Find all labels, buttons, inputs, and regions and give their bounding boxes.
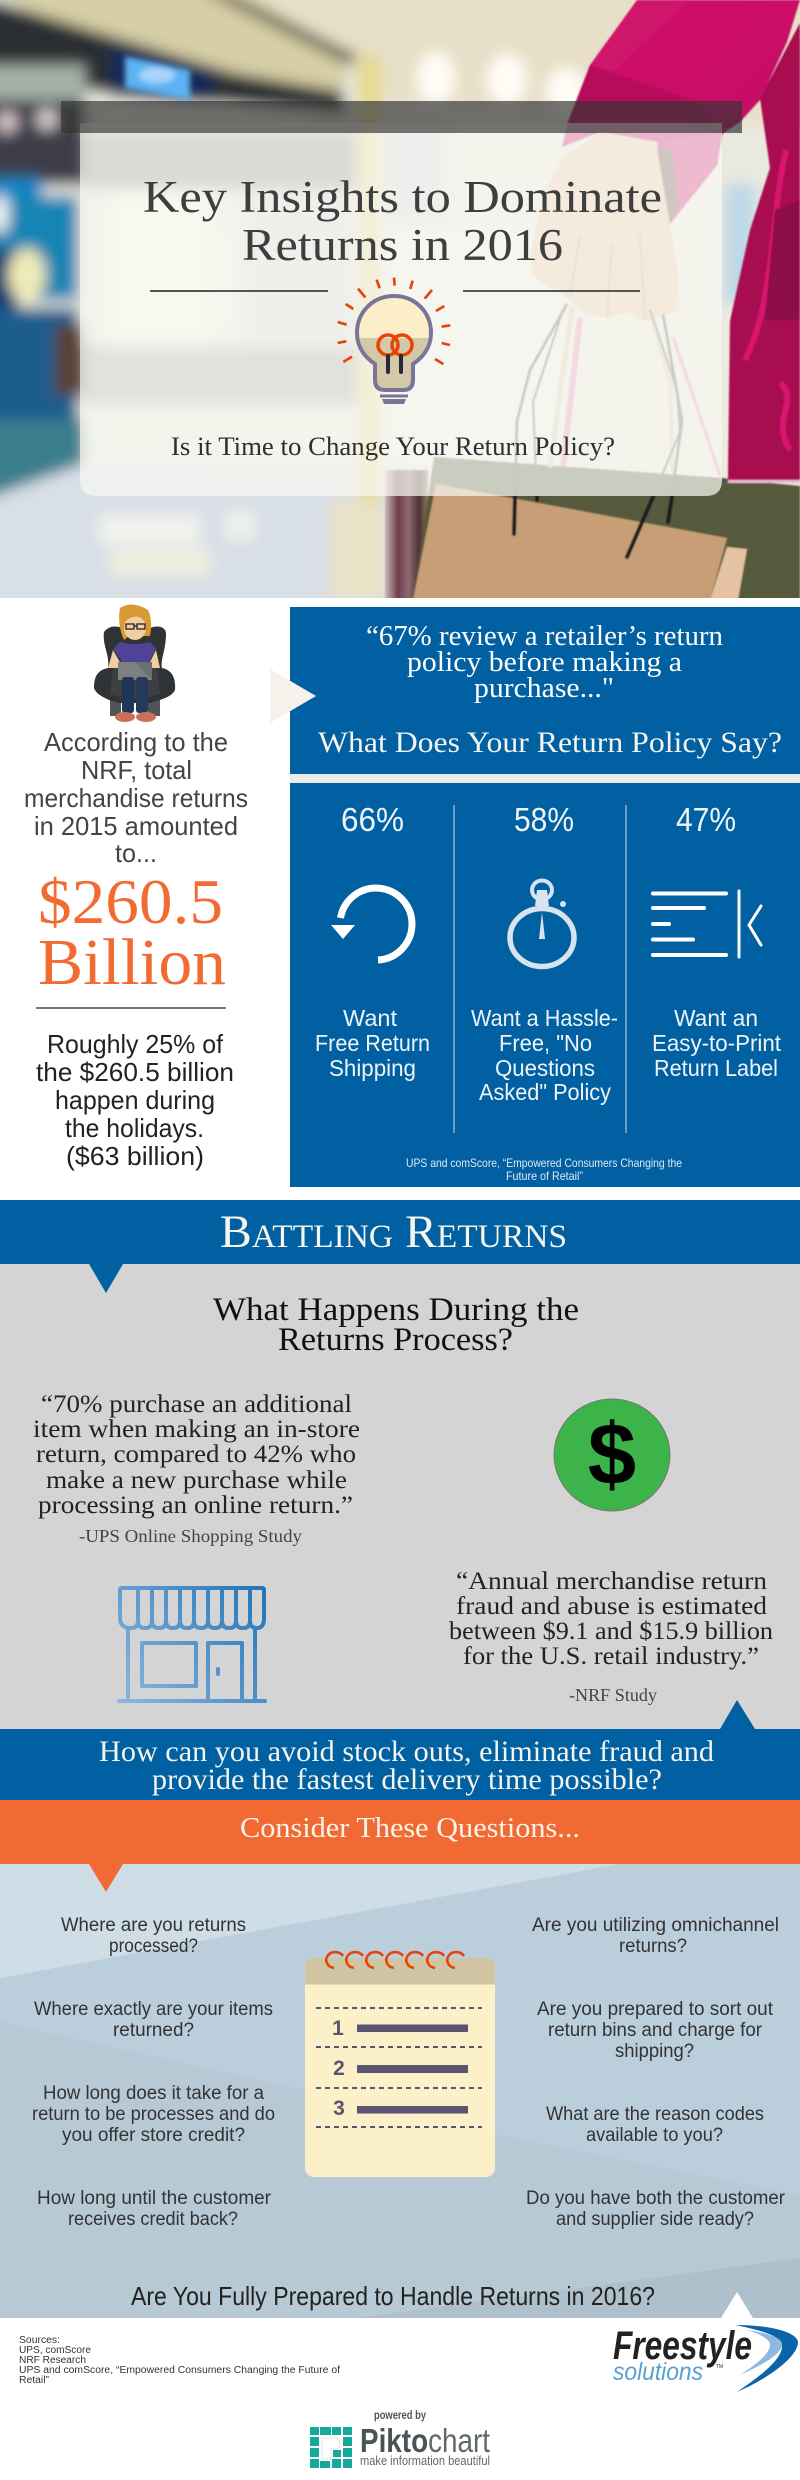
hero photo: blurred shopping mall with shopper [0,0,800,630]
section: battling returns [0,1200,800,1800]
right questions: What are the reason codes [546,2104,764,2125]
logo: Freestyle Solutions: solutions [613,2358,703,2386]
quote: in-store purchases: processing an online return.” [38,1492,353,1519]
left questions: returned? [113,2020,194,2041]
right questions: available to you? [586,2125,723,2146]
section background [0,1864,800,2318]
icon: light bulb [338,278,450,404]
holiday statistic [36,1029,234,1171]
left questions: return to be processes and do [32,2104,275,2125]
stat: hassle-free: Questions [495,1055,595,1081]
stat: free return shipping: Shipping [329,1055,416,1081]
logo: Piktochart [310,2422,490,2468]
intro text [24,727,248,868]
right questions: Are you utilizing omnichannel [532,1915,779,1936]
right questions: and supplier side ready? [556,2209,754,2230]
source note: Future of Retail” [506,1169,583,1183]
powered by credit: powered by [374,2408,426,2422]
stat: free return shipping: Free Return [315,1030,430,1056]
stat: easy-to-print label: Want an [674,1005,758,1031]
right questions: shipping? [615,2041,694,2062]
title: Key Insights to Dominate [143,172,662,222]
section: consider these questions [0,1800,800,2318]
icon: dollar coin: $ [588,1406,636,1503]
illustration: person in armchair with laptop [94,604,175,722]
hero banner [0,0,800,630]
title [143,172,662,270]
holiday statistic: the holidays. [65,1113,204,1143]
holiday statistic: ($63 billion) [66,1141,204,1171]
quote: fraud: for the U.S. retail industry.” [463,1643,759,1670]
sources: UPS and comScore, “Empowered Consumers Changing the Future of [19,2365,340,2376]
question band [0,1729,800,1800]
stat: easy-to-print label: Easy-to-Print [652,1030,782,1056]
icon: store front [119,1588,265,1701]
section heading band [0,1200,800,1264]
right questions: Do you have both the customer [526,2188,786,2209]
left questions: you offer store credit? [62,2125,245,2146]
logo: Freestyle Solutions: Freestyle [613,2324,752,2368]
left questions: receives credit back? [68,2209,238,2230]
left questions [32,1915,275,2230]
quote: purchase..." [474,672,614,704]
logo: Piktochart: Piktochart [360,2422,490,2459]
big number [38,867,226,999]
left questions: Where are you returns [61,1915,246,1936]
icon: notepad checklist [305,1952,495,2177]
quote: fraud [449,1568,774,1670]
left questions: Where exactly are your items [34,1999,273,2020]
big number: Billion [38,926,226,999]
quote: in-store purchases: item when making an in-store [33,1416,360,1443]
stat: hassle-free: Free, "No [499,1030,592,1056]
stat: free return shipping: Want [343,1005,398,1031]
question band: How can you avoid stock outs, eliminate fraud and [99,1735,714,1768]
section: battling returns: Battling Returns [220,1206,567,1258]
quote: fraud: “Annual merchandise return [456,1568,768,1595]
closing question: Are You Fully Prepared to Handle Returns in 2016? [131,2281,655,2311]
quote: policy before making a [407,646,682,678]
sources: Retail” [19,2375,49,2386]
question band: provide the fastest delivery time possible? [152,1763,662,1796]
left questions: processed? [109,1936,198,1957]
big number: $260.5 [38,867,223,937]
sources: NRF Research [19,2355,86,2366]
intro text: According to the [44,727,228,757]
subheading: Returns Process? [278,1322,513,1358]
policy heading: What Does Your Return Policy Say? [318,726,782,759]
source note [406,1156,682,1183]
quote: fraud: between $9.1 and $15.9 billion [449,1618,774,1645]
orange heading band: Consider These Questions... [240,1812,580,1844]
subheading [213,1292,579,1358]
holiday statistic: the $260.5 billion [36,1057,234,1087]
holiday statistic: Roughly 25% of [47,1029,224,1059]
stat: hassle-free: Want a Hassle- [471,1005,618,1031]
attribution: -NRF Study [569,1685,657,1705]
left questions: How long until the customer [37,2188,272,2209]
subtitle: Is it Time to Change Your Return Policy? [171,432,615,461]
quote: in-store purchases: return, compared to 42% who [36,1441,356,1468]
right questions: Are you prepared to sort out [537,1999,774,2020]
sources: UPS, comScore [19,2345,91,2356]
stat: free return shipping [315,801,430,1081]
right questions [526,1915,786,2230]
logo: Piktochart: make information beautiful [360,2454,490,2468]
intro text: in 2015 amounted [34,811,238,841]
holiday statistic: happen during [55,1085,215,1115]
source note: UPS and comScore, “Empowered Consumers Changing the [406,1156,682,1170]
quote: in-store purchases: “70% purchase an additional [41,1391,352,1418]
sources [19,2335,340,2386]
quote [366,620,723,704]
logo: Freestyle Solutions: TM [716,2364,723,2370]
quote: “67% review a retailer’s return [366,620,723,652]
left column: NRF statistics [24,604,248,1171]
intro text: NRF, total [81,755,192,785]
attribution: -UPS Online Shopping Study [79,1526,302,1546]
icon: notepad checklist: 1 [332,2017,344,2040]
title panel [80,123,722,496]
left questions: How long does it take for a [43,2083,264,2104]
icon: dollar coin [554,1399,670,1511]
intro text: to... [115,838,157,868]
title rules [150,290,640,292]
intro text: merchandise returns [24,783,248,813]
right questions: returns? [619,1936,687,1957]
stat: hassle-free [471,801,618,1105]
orange heading band [0,1800,800,1864]
stat: free return shipping: 66% [341,801,404,838]
stat: hassle-free: Asked" Policy [479,1079,611,1105]
stat: easy-to-print label [652,801,782,1081]
icon: notepad checklist: 2 [333,2057,345,2080]
stat: hassle-free: 58% [514,801,574,838]
right questions: return bins and charge for [548,2020,763,2041]
dark top bar [61,101,742,133]
panel: return policy [270,607,800,1187]
title: Returns in 2016 [242,220,563,270]
quote: in-store purchases [33,1391,360,1519]
stat: easy-to-print label: Return Label [654,1055,778,1081]
sources: Sources: [19,2335,60,2346]
icon: notepad checklist: 3 [333,2097,345,2120]
quote: in-store purchases: make a new purchase while [46,1467,347,1494]
arrow [270,669,316,723]
stat: easy-to-print label: 47% [676,801,736,838]
logo: Freestyle Solutions [613,2324,798,2392]
subheading: What Happens During the [213,1292,579,1328]
quote: fraud: fraud and abuse is estimated [456,1593,768,1620]
